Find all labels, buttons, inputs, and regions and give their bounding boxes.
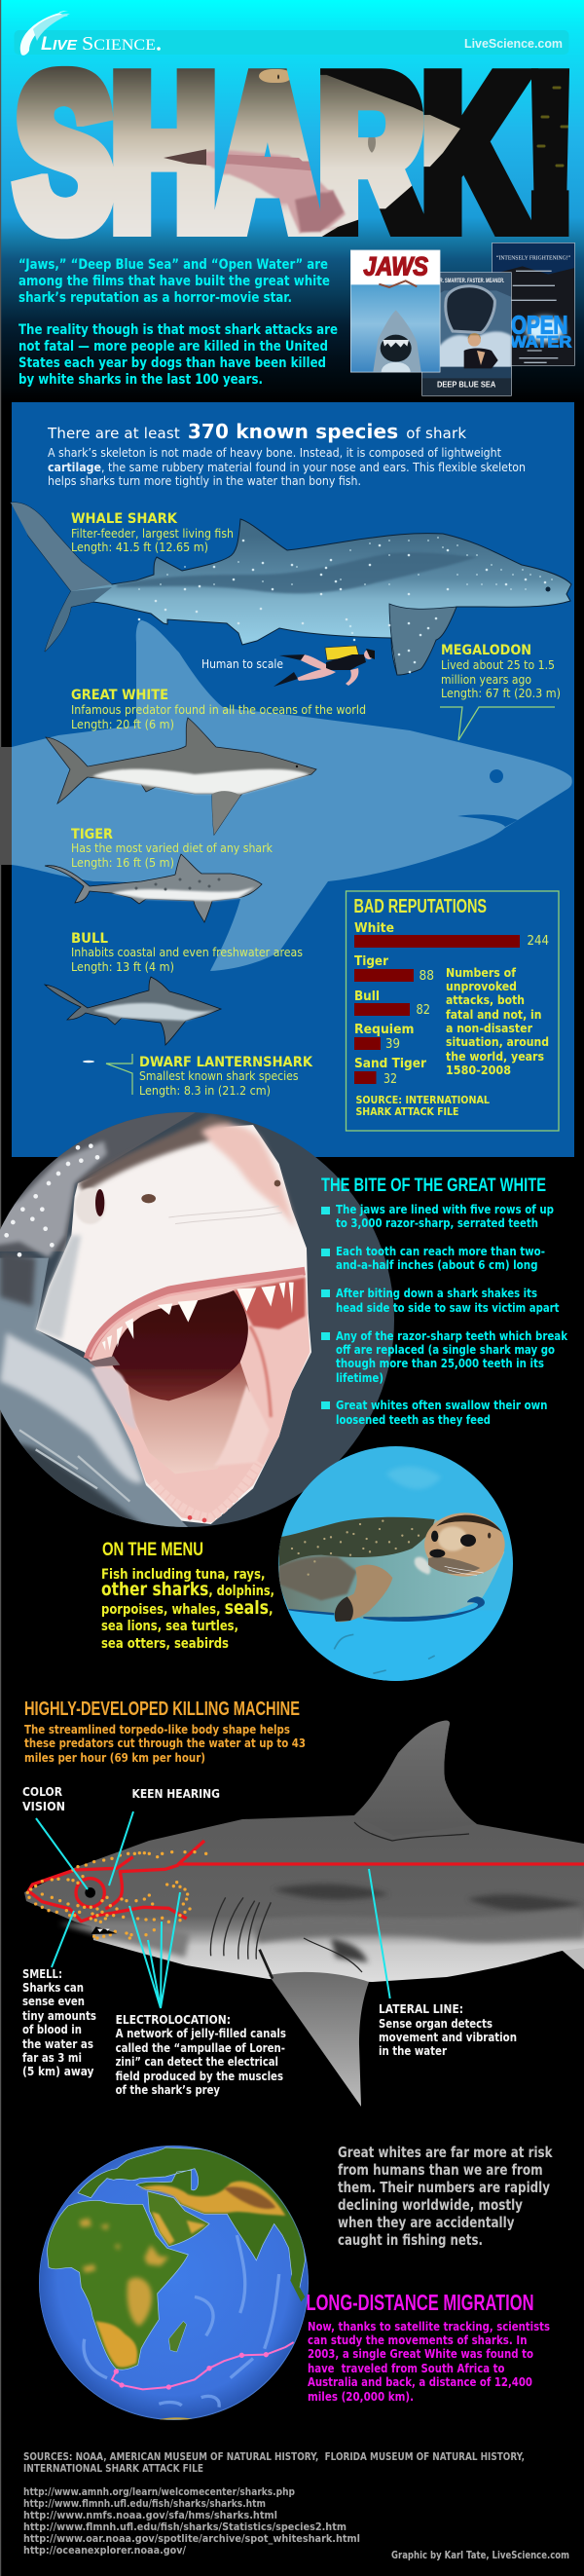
sources: http://www.flmnh.ufl.edu/fish/sharks/sharks.htm [23, 2498, 266, 2510]
ocean gradient header background [0, 0, 584, 402]
fact: replacement: lifetime) [336, 1371, 383, 1385]
illustration: great white [46, 718, 316, 835]
label: lateral line [379, 2002, 517, 2058]
label: whale shark: Length: 41.5 ft (12.65 m) [71, 541, 208, 554]
label: tiger: Length: 16 ft (5 m) [71, 856, 174, 870]
fact: tooth size: and-a-half inches (about 6 cm) long [336, 1258, 537, 1272]
label: whale shark: Filter-feeder, largest living fish [71, 527, 234, 541]
row: sand tiger [354, 1057, 427, 1087]
label: electrolocation [116, 2013, 286, 2097]
chart note: situation, around [446, 1035, 549, 1049]
fact: jaws [321, 1203, 554, 1230]
text: great whites at risk: caught in fishing nets. [338, 2231, 483, 2249]
label: smell: tiny amounts [22, 2009, 96, 2023]
prey list [101, 1567, 274, 1652]
migration route [112, 2342, 294, 2389]
chart note: the world, years [446, 1050, 544, 1064]
intro text: “Jaws,” “Deep Blue Sea” and “Open Water” are [18, 257, 328, 273]
label: electrolocation: of the shark’s prey [116, 2083, 220, 2097]
fact: swallowing [321, 1399, 547, 1427]
label: dwarf lanternshark: Smallest known shark species [139, 1069, 298, 1083]
sources [23, 2451, 525, 2557]
logo: LiveScience: SCIENCE [82, 33, 156, 55]
label: smell: far as 3 mi [22, 2051, 82, 2065]
row: bull [354, 989, 430, 1018]
prey list: porpoises, whales, seals, [101, 1597, 273, 1619]
intro text: among the films that have built the great white [18, 274, 330, 289]
sources: http://oceanexplorer.noaa.gov/ [23, 2545, 186, 2557]
mouth interior [88, 1271, 310, 1522]
fact: sawing [321, 1287, 560, 1315]
label: smell: (5 km) away [22, 2065, 94, 2078]
label: bull: BULL [71, 931, 108, 947]
fact: sawing: After biting down a shark shakes its [336, 1287, 537, 1300]
chart note: 1580-2008 [446, 1064, 511, 1077]
movie posters [350, 243, 575, 396]
prey list: sea lions, sea turtles, [101, 1619, 238, 1634]
site url: LiveScience.com [464, 36, 563, 51]
illustration: dwarf lanternshark [83, 1061, 94, 1063]
panel intro: A shark’s skeleton is not made of heavy bone. Instead, it is composed of lightweight [48, 446, 501, 460]
label: smell: sense even [22, 1995, 85, 2008]
sensory canals, eye and ampullae [27, 1841, 584, 1979]
fact: jaws: to 3,000 razor-sharp, serrated teeth [336, 1216, 538, 1230]
photo: great white open mouth [0, 1105, 399, 1534]
label: great white: GREAT WHITE [71, 688, 168, 703]
heading: HIGHLY-DEVELOPED KILLING MACHINE [24, 1699, 300, 1720]
label: lateral line: in the water [379, 2044, 447, 2058]
label: smell: Sharks can [22, 1981, 84, 1995]
label: bull [71, 931, 303, 974]
label: whale shark [71, 511, 234, 554]
label: electrolocation: called the “ampullae of Loren- [116, 2041, 285, 2055]
body: 2003, a single Great White was found to [308, 2347, 533, 2361]
land: Africa [47, 2200, 188, 2370]
prey list: sea otters, seabirds [101, 1636, 229, 1652]
label: lateral line: LATERAL LINE: [379, 2002, 463, 2016]
fact: swallowing: Great whites often swallow their own [336, 1399, 547, 1412]
label: megalodon: Length: 67 ft (20.3 m) [441, 687, 561, 700]
poster: Open Water: “INTENSELY FRIGHTENING!” [496, 255, 570, 262]
label: megalodon [441, 643, 561, 700]
poster: Deep Blue Sea: DEEP BLUE SEA [437, 380, 496, 390]
logo: LiveScience [20, 11, 161, 56]
label: megalodon: MEGALODON [441, 643, 531, 658]
chart source: SOURCE: INTERNATIONAL [356, 1095, 490, 1106]
label: smell: SMELL: [22, 1967, 62, 1981]
text: great whites at risk: when they are accidentally [338, 2214, 515, 2231]
fact: tooth size [321, 1245, 545, 1272]
row: bull: Bull [354, 989, 380, 1004]
intro text: not fatal — more people are killed in the United [18, 339, 328, 355]
megalodon silhouette [12, 620, 572, 971]
label: dwarf lanternshark: DWARF LANTERNSHARK [139, 1055, 313, 1070]
label: color vision [22, 1785, 65, 1813]
panel heading: There are at least 370 known species of shark [47, 420, 466, 443]
poster: Open Water: WATER [510, 332, 571, 351]
body [308, 2320, 550, 2404]
illustration: whale shark [11, 503, 571, 675]
text: great whites at risk [338, 2144, 553, 2249]
poster: Jaws: JAWS [363, 252, 428, 281]
row: white: White [354, 921, 394, 936]
chart note: unprovoked [446, 980, 517, 993]
land: Madagascar [168, 2321, 187, 2352]
label: megalodon: Lived about 25 to 1.5 [441, 658, 555, 672]
chart: bad reputations [347, 891, 559, 1131]
row: white [354, 921, 549, 949]
label: dwarf lanternshark [139, 1055, 313, 1098]
chart note: a non-disaster [446, 1022, 532, 1035]
sources: http://www.nmfs.noaa.gov/sfa/hms/sharks.html [23, 2510, 277, 2521]
body: Australia and back, a distance of 12,400 [308, 2375, 532, 2389]
label: great white: Length: 20 ft (6 m) [71, 718, 174, 731]
label: color vision: VISION [22, 1800, 65, 1813]
label: human to scale: Human to scale [201, 657, 283, 671]
intro: miles per hour (69 km per hour) [24, 1751, 205, 1765]
label: bull: Length: 13 ft (4 m) [71, 960, 174, 974]
label: electrolocation: field produced by the muscles [116, 2070, 283, 2083]
chart note: attacks, both [446, 993, 525, 1007]
sources: INTERNATIONAL SHARK ATTACK FILE [23, 2463, 203, 2475]
section: long-distance migration [306, 2290, 550, 2404]
pointer lines [36, 1811, 390, 2008]
poster: Jaws [350, 250, 440, 372]
row: tiger: Tiger [354, 954, 389, 969]
text: great whites at risk: declining worldwide, mostly [338, 2196, 523, 2214]
section: killing machine [22, 1699, 584, 2107]
fact: tooth size: Each tooth can reach more than two- [336, 1245, 545, 1258]
intro [24, 1723, 306, 1765]
label: bull: Inhabits coastal and even freshwater areas [71, 946, 303, 959]
label: great white [71, 688, 366, 731]
sources: http://www.amnh.org/learn/welcomecenter/sharks.php [23, 2486, 295, 2498]
label: smell [22, 1967, 96, 2078]
chart note: Numbers of [446, 966, 517, 980]
illustration: tiger shark [45, 854, 262, 922]
intro text: by white sharks in the last 100 years. [18, 372, 263, 388]
chart note: fatal and not, in [446, 1008, 541, 1022]
chart note [446, 966, 549, 1077]
body: have traveled from South Africa to [308, 2362, 504, 2375]
intro text: The reality though is that most shark attacks are [18, 322, 338, 338]
label: keen hearing: KEEN HEARING [132, 1787, 220, 1801]
panel intro: helps sharks turn more tightly in the water than bony fish. [48, 474, 361, 488]
label: smell: the water as [22, 2037, 93, 2051]
row: bull: 82 [417, 1003, 430, 1018]
photo: seal [273, 1441, 516, 1685]
row: requiem: 39 [385, 1037, 400, 1052]
chart source [356, 1095, 490, 1118]
intro text: shark’s reputation as a horror-movie star. [18, 290, 292, 306]
row: sand tiger: Sand Tiger [354, 1057, 427, 1071]
poster: Deep Blue Sea: R. SMARTER. FASTER. MEANER. [440, 279, 505, 284]
fact: jaws: The jaws are lined with five rows of up [336, 1203, 554, 1216]
chart title: BAD REPUTATIONS [354, 896, 487, 917]
body: miles (20,000 km). [308, 2390, 414, 2404]
header bar [14, 11, 568, 56]
callout lines [106, 707, 555, 1095]
fact: replacement: though more than 25,000 teeth in its [336, 1357, 544, 1370]
chart source: SHARK ATTACK FILE [356, 1106, 459, 1118]
sources: http://www.flmnh.ufl.edu/fish/sharks/Statistics/species2.htm [23, 2521, 347, 2533]
label: color vision: COLOR [22, 1785, 62, 1799]
poster: Open Water: OPEN [511, 310, 567, 339]
fact: replacement [321, 1329, 568, 1385]
label: whale shark: WHALE SHARK [71, 511, 178, 527]
intro text: States each year by dogs than have been killed [18, 355, 326, 371]
label: tiger [71, 827, 273, 870]
label: dwarf lanternshark: Length: 8.3 in (21.2 cm) [139, 1084, 271, 1098]
poster: Open Water [492, 243, 575, 366]
land: Arabia [148, 2191, 209, 2247]
land: Sumatra [290, 2274, 305, 2301]
panel intro: cartilage, the same rubbery material found in your nose and ears. This flexible skeleton [48, 461, 526, 474]
row: white: 244 [528, 934, 549, 949]
row: tiger: 88 [419, 969, 434, 984]
shark anatomy illustration [24, 1721, 584, 2107]
label: tiger: Has the most varied diet of any shark [71, 841, 273, 855]
label: great white: Infamous predator found in all the oceans of the world [71, 703, 366, 717]
illustration: bull shark [45, 977, 221, 1045]
label: smell: of blood in [22, 2023, 82, 2036]
label: electrolocation: A network of jelly-filled canals [116, 2027, 286, 2040]
sources: http://www.oar.noaa.gov/spotlite/archive/spot_whiteshark.html [23, 2533, 360, 2545]
label: lateral line: movement and vibration [379, 2031, 517, 2044]
row: requiem [354, 1023, 415, 1052]
label: megalodon: million years ago [441, 673, 531, 687]
intro: these predators cut through the water at up to 43 [24, 1736, 306, 1750]
fact: swallowing: loosened teeth as they feed [336, 1413, 491, 1427]
row: sand tiger: 32 [383, 1072, 397, 1087]
illustration: human diver to scale [274, 626, 375, 687]
prey list: Fish including tuna, rays, [101, 1567, 265, 1583]
left margin tint from megalodon [0, 747, 12, 865]
section: the bite of the great white [321, 1176, 568, 1427]
globe with migration route [39, 2146, 309, 2420]
prey list: other sharks, dolphins, [101, 1579, 274, 1600]
panel: shark species [0, 402, 574, 1157]
label: electrolocation: zini” can detect the electrical [116, 2055, 278, 2069]
panel intro [48, 446, 526, 488]
body: can study the movements of sharks. In [308, 2333, 528, 2347]
label: lateral line: Sense organ detects [379, 2017, 493, 2031]
land: Eurasia [78, 2147, 305, 2294]
poster: Deep Blue Sea [421, 272, 512, 396]
intro text [18, 257, 338, 388]
label: tiger: TIGER [71, 827, 113, 842]
row: requiem: Requiem [354, 1023, 415, 1037]
heading: ON THE MENU [102, 1540, 203, 1560]
row: tiger [354, 954, 434, 984]
intro: The streamlined torpedo-like body shape helps [24, 1723, 290, 1736]
section: on the menu [101, 1540, 274, 1652]
label: electrolocation: ELECTROLOCATION: [116, 2013, 231, 2027]
logo: LiveScience: LIVE [41, 34, 78, 55]
